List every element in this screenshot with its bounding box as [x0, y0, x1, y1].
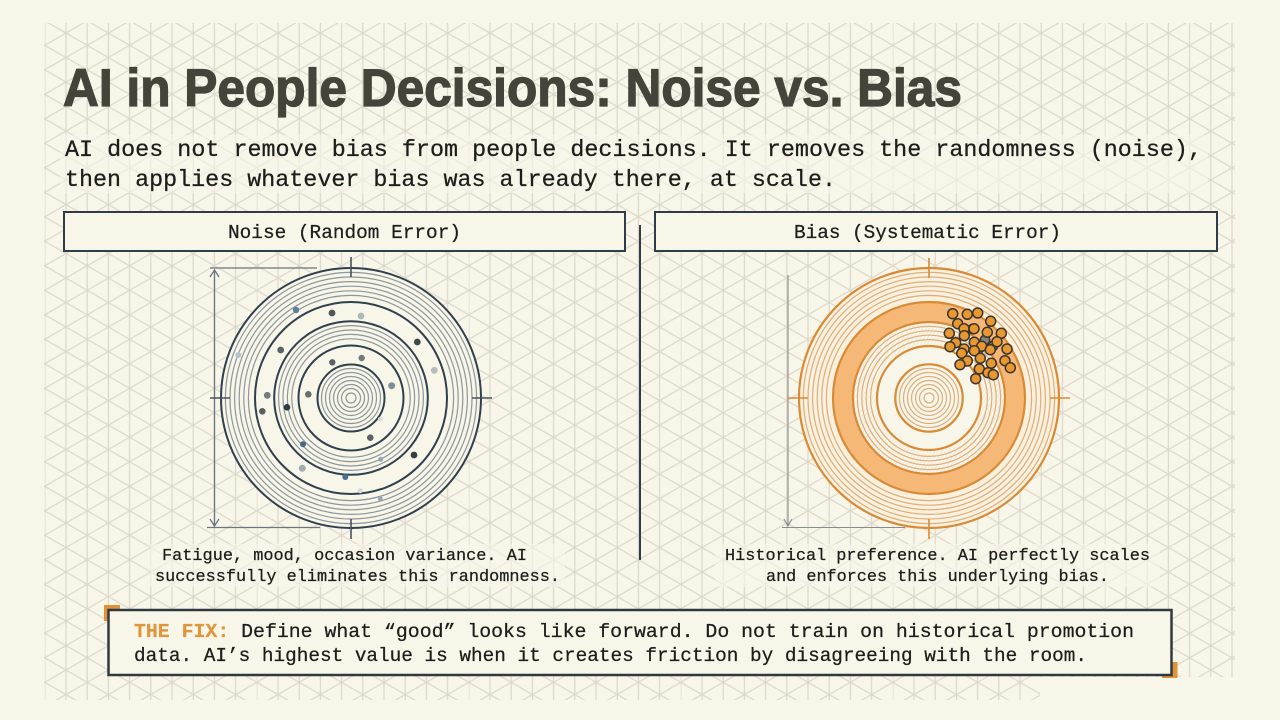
- panel: noise header: Noise (Random Error): [228, 222, 461, 244]
- target rings: bias: [788, 258, 1070, 539]
- callout text: [134, 621, 1134, 667]
- caption: bias: [715, 544, 1160, 587]
- caption: noise: successfully eliminates this randomness.: [155, 568, 560, 587]
- dimension arrow: noise target height: [207, 268, 320, 528]
- caption: bias: Historical preference. AI perfectly scales: [725, 547, 1150, 566]
- corner accent: top left: [104, 605, 120, 621]
- chart: noise target: [207, 257, 492, 539]
- caption: bias: and enforces this underlying bias.: [766, 568, 1109, 587]
- callout: the fix: [104, 605, 1178, 678]
- callout text: data. AI’s highest value is when it creates friction by disagreeing with the room.: [134, 645, 1087, 667]
- scatter dots: noise: [235, 307, 438, 501]
- subtitle: AI does not remove bias from people decisions. It removes the randomness (noise),: [65, 138, 1202, 164]
- caption: noise: Fatigue, mood, occasion variance. AI: [162, 547, 527, 566]
- callout text: THE FIX: Define what “good” looks like forward. Do not train on historical promotion: [134, 621, 1134, 643]
- caption: noise: [150, 544, 565, 587]
- dimension arrow: bias target height: [782, 275, 905, 528]
- panel: bias header: Bias (Systematic Error): [794, 222, 1061, 244]
- scatter dots: bias cluster: [944, 308, 1015, 384]
- panel: bias header: [655, 212, 1217, 251]
- subtitle: then applies whatever bias was already there, at scale.: [65, 168, 836, 194]
- subtitle: [60, 135, 1208, 194]
- chart: bias target: [782, 258, 1070, 539]
- title: AI in People Decisions: Noise vs. Bias: [63, 59, 962, 118]
- corner accent: bottom right: [1162, 662, 1178, 678]
- panel divider: [639, 225, 641, 560]
- target rings: noise: [210, 257, 492, 539]
- panel: noise header: [64, 212, 625, 251]
